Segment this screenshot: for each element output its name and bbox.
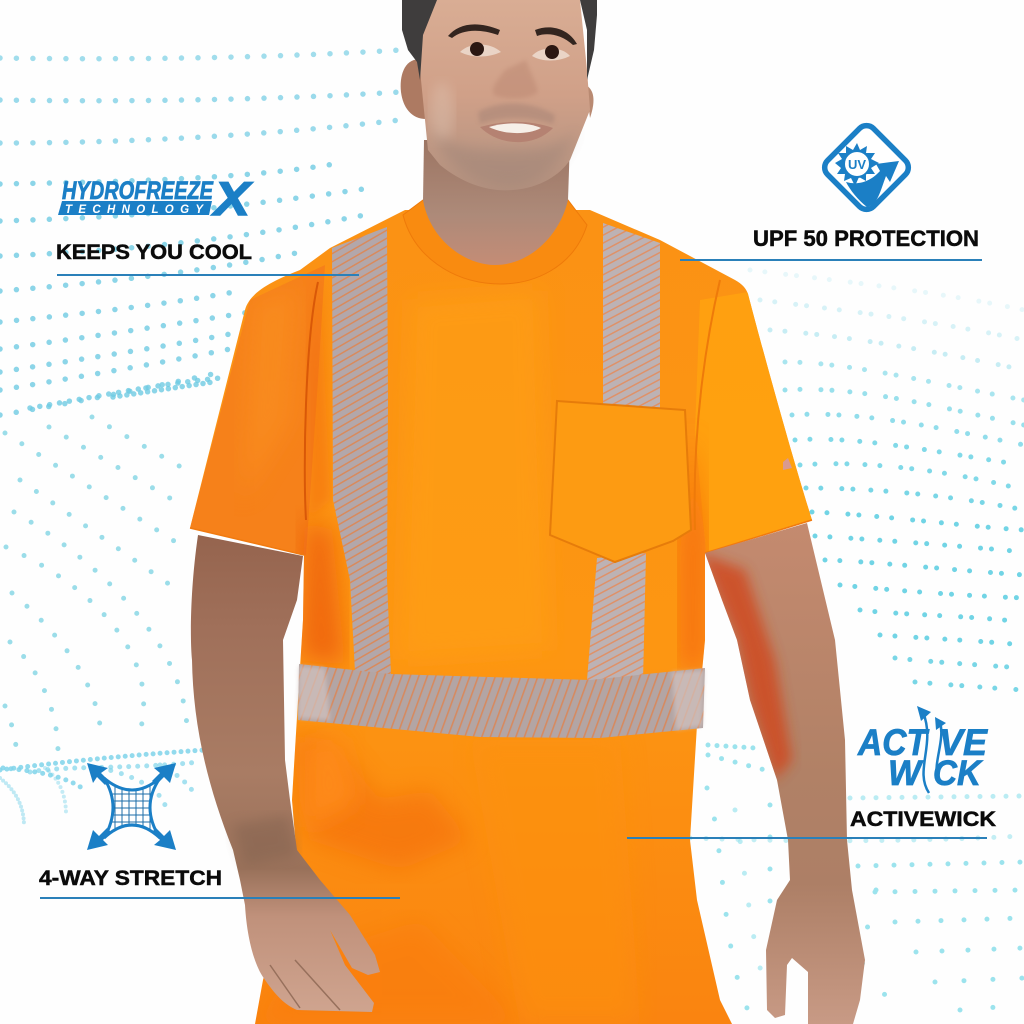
reflective tape: waist band xyxy=(298,664,705,738)
reflective tape: left strap xyxy=(332,227,391,675)
label: 4-way stretch: 4-WAY STRETCH xyxy=(39,867,222,890)
icon: UV diamond: UV xyxy=(848,157,866,172)
right arm and hand xyxy=(705,523,865,1024)
label: ActiveWick: ACTIVEWICK xyxy=(850,808,996,831)
leader line xyxy=(627,837,987,839)
callout: UPF 50 xyxy=(680,122,982,261)
dotted clump: lower left xyxy=(0,750,205,826)
ears xyxy=(401,59,428,119)
pale sleeve logo xyxy=(783,458,792,470)
leader line xyxy=(57,274,359,276)
right arm inner shadow xyxy=(700,553,792,780)
logo: Hydrofreeze X Technology: HYDROFREEZE xyxy=(62,177,214,205)
chest pocket xyxy=(550,401,691,562)
hair xyxy=(402,0,597,80)
finger lines xyxy=(270,960,340,1010)
label: keeps you cool: KEEPS YOU COOL xyxy=(56,241,252,264)
nose xyxy=(493,60,538,98)
reflective tape: right strap lower xyxy=(587,553,646,682)
icon: UV diamond xyxy=(821,122,912,213)
callout: 4-way stretch xyxy=(39,763,400,899)
leader line xyxy=(40,897,400,899)
stubble xyxy=(432,125,578,186)
left arm and hand xyxy=(191,535,380,1012)
logo: Active Wick xyxy=(857,706,988,793)
logo: Hydrofreeze X Technology: TECHNOLOGY xyxy=(65,204,204,216)
shirt shading xyxy=(190,265,812,1024)
left wrist shadow xyxy=(232,815,296,865)
icon: 4-way stretch xyxy=(87,763,176,850)
callout: Hydrofreeze X xyxy=(56,172,359,276)
sleeve seams xyxy=(190,520,812,555)
dotted wave pattern: left lower arcs xyxy=(5,417,188,753)
logo: Active Wick: CK xyxy=(933,754,984,793)
dotted scatter: right side xyxy=(750,270,1024,690)
reflective tape: right strap upper xyxy=(603,223,660,412)
logo: Active Wick: ACT xyxy=(857,722,930,763)
cheek highlight xyxy=(430,82,454,142)
label: UPF 50 protection: UPF 50 PROTECTION xyxy=(753,226,979,251)
logo: Hydrofreeze X Technology: X xyxy=(211,172,253,225)
waist band highlights xyxy=(298,666,704,730)
collar band xyxy=(403,200,587,284)
shirt body and sleeves xyxy=(190,210,812,1024)
callout: ActiveWick xyxy=(627,706,996,839)
leader line xyxy=(680,259,982,261)
dotted rows: lower right xyxy=(690,745,1024,1015)
logo: Hydrofreeze X Technology xyxy=(58,172,253,225)
man wearing hi-vis shirt xyxy=(190,0,865,1024)
face xyxy=(420,0,590,190)
smile xyxy=(480,122,553,142)
moustache shadow xyxy=(478,103,555,124)
neck xyxy=(423,140,570,265)
dotted wave pattern: left upper rows xyxy=(0,50,400,415)
logo: Active Wick: W xyxy=(888,754,924,793)
logo: Active Wick: VE xyxy=(939,722,988,763)
eyes and brows xyxy=(448,24,577,60)
